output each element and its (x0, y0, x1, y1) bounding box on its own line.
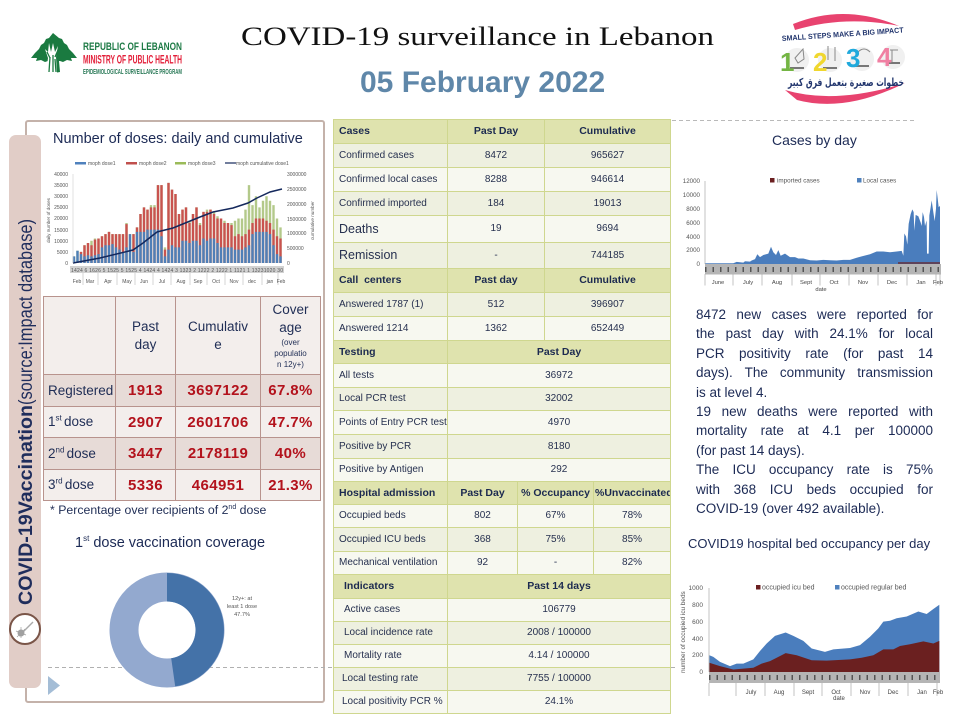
left axis: 0 (65, 261, 68, 267)
cases: 9694 (596, 223, 619, 234)
table: vaccination: 1913 (128, 382, 163, 399)
chart: hospital bed occupancy: date (833, 696, 845, 702)
chart: hospital bed occupancy: July (746, 690, 756, 696)
sidebar text: COVID-19Vaccination(source:Impact database) (16, 219, 37, 605)
axis: 800 (692, 602, 703, 609)
heading: first dose coverage: 1st dose vaccination coverage (75, 534, 265, 551)
table: vaccination: 464951 (192, 476, 244, 494)
text block: daily summary: (for past 14 days). (696, 443, 805, 458)
table: vaccination: 2178119 (188, 445, 248, 462)
table: vaccination: Cumulativ (188, 318, 248, 334)
right axis: 1500000 (287, 217, 307, 223)
local cases area (705, 190, 940, 264)
table: vaccination: day (135, 336, 156, 352)
left axis: 15000 (54, 228, 68, 234)
cases: Active cases (344, 604, 400, 615)
arabic slogan: خطوات صغيرة بتعمل فرق كبير (787, 76, 904, 89)
cases: Mechanical ventilation (339, 557, 437, 568)
donut label: least 1 dose (227, 604, 257, 610)
text block: daily summary: 8472 new cases were reported for (696, 307, 933, 322)
table: vaccination: Past (132, 318, 159, 334)
table: vaccination: e (214, 336, 222, 352)
cases: 965627 (591, 150, 624, 160)
table: vaccination: 3rd dose (48, 477, 94, 492)
cases: 75% (546, 534, 566, 544)
chart: hospital bed occupancy: Sept (802, 690, 815, 696)
cases: 19013 (594, 198, 621, 208)
donut label (227, 596, 257, 618)
chart: cases by day: Sept (800, 280, 812, 286)
table: vaccination: Cover (272, 302, 308, 317)
cumulative line (73, 189, 282, 263)
cases: Past Day (474, 125, 518, 137)
cases: Local positivity PCR % (342, 696, 443, 707)
legend (770, 178, 896, 184)
chart: cases by day: June (712, 280, 724, 286)
table: vaccination: 2nd dose (48, 445, 96, 461)
date band (709, 672, 940, 683)
table: vaccination: 3447 (128, 445, 163, 462)
cases: 4.14 / 100000 (528, 650, 590, 661)
table: vaccination: Registered (48, 383, 113, 398)
cases: Cumulative (579, 274, 636, 286)
axis: 10000 (683, 192, 701, 199)
heading: number of doses: Number of doses: daily and cumulative (53, 131, 303, 147)
areas (709, 605, 939, 672)
table: vaccination: 2601706 (187, 414, 249, 430)
chart: cases by day: Oct (829, 280, 839, 286)
donut label: 12y+: at (232, 596, 252, 602)
cases: Past Day (460, 487, 505, 499)
cases: 24.1% (545, 696, 573, 707)
cases (334, 120, 671, 713)
cases: 744185 (591, 250, 624, 260)
cases: 36972 (545, 370, 573, 380)
months: Mar (86, 279, 95, 285)
legend: moph cumulative dose1 (236, 161, 289, 167)
left axis: 20000 (54, 216, 68, 222)
cases: 1362 (485, 322, 507, 334)
cases: Local testing rate (342, 673, 418, 684)
table: vaccination: (over (281, 338, 300, 347)
axis (689, 585, 703, 676)
cases: Local incidence rate (344, 627, 433, 638)
chart: hospital bed occupancy: Dec (888, 690, 898, 696)
footnote: * Percentage over recipients of 2nd dose (50, 503, 266, 517)
legend: Local cases (863, 178, 896, 184)
axis: 600 (692, 619, 703, 626)
sidebar: vaccination label (9, 135, 41, 688)
axis: 200 (692, 652, 703, 659)
cases: Confirmed local cases (339, 174, 437, 184)
icon: cedar tree (31, 33, 77, 73)
months: Aug (177, 279, 186, 285)
chart: cases by day: Aug (772, 280, 782, 286)
cases: Past Day (537, 346, 581, 358)
chart: donut first dose coverage (110, 572, 257, 688)
right axis: 0 (287, 261, 290, 267)
table: vaccination: 21.3% (268, 476, 313, 494)
axis (683, 178, 701, 268)
months: Sep (194, 279, 203, 285)
text block: daily summary: with 368 ICU beds occupied for (696, 482, 933, 497)
logo text: MINISTRY OF PUBLIC HEALTH (83, 54, 182, 66)
axis: 400 (692, 636, 703, 643)
imported cases line (898, 262, 940, 264)
months: Jun (140, 279, 148, 285)
cases: 82% (622, 557, 642, 568)
cases: Deaths (339, 222, 379, 236)
chart: cases by day: July (743, 280, 753, 286)
table: vaccination: n 12y+) (277, 360, 304, 369)
heading: cases by day: Cases by day (772, 132, 857, 148)
logo text: REPUBLIC OF LEBANON (83, 41, 182, 53)
step numbers: 4 (877, 42, 892, 72)
months: Oct (212, 279, 220, 285)
cases: Answered 1787 (1) (339, 298, 424, 310)
cases: Call centers (339, 274, 401, 286)
logo: Ministry of Public Health (31, 33, 182, 76)
text block: daily summary: The ICU occupancy rate is 75% (696, 462, 933, 477)
table: vaccination: age (279, 320, 302, 335)
cases: 184 (488, 198, 504, 208)
months: Feb (277, 279, 286, 285)
cases: Positive by PCR (339, 440, 411, 452)
months: dec (248, 279, 257, 285)
logo text (83, 41, 182, 76)
right axis: 2000000 (287, 202, 307, 208)
chart: hospital bed occupancy: Oct (831, 690, 841, 696)
left axis: 5000 (57, 250, 68, 256)
text block: daily summary: days). The community transmission (696, 365, 933, 380)
axis: 1000 (689, 585, 703, 592)
slogan: SMALL STEPS MAKE A BIG IMPACT (782, 25, 904, 43)
cases: 32002 (545, 393, 573, 404)
months: Nov (230, 279, 239, 285)
cases: Cases (339, 125, 370, 137)
cases: 802 (474, 510, 491, 521)
right axis (287, 172, 307, 267)
cases: Past day (474, 274, 518, 286)
table: vaccination (43, 296, 321, 501)
text block: daily summary: PCR positivity rate (for past 14 (696, 346, 933, 361)
chart: hospital bed occupancy (678, 584, 944, 702)
step numbers: 2 (813, 47, 827, 77)
right axis: 3000000 (287, 172, 307, 178)
cases: %Unvaccinated (595, 487, 671, 499)
cases: 8472 (485, 150, 507, 160)
cases: Positive by Antigen (339, 464, 424, 475)
donut label: 47.7% (234, 612, 250, 618)
cases: 8288 (485, 174, 507, 184)
title: COVID-19 surveillance in Lebanon (241, 22, 714, 51)
cases: 7755 / 100000 (527, 673, 591, 684)
months: May (122, 279, 132, 285)
pink arcs (785, 14, 905, 104)
left axis: 40000 (54, 172, 68, 178)
left axis: 35000 (54, 183, 68, 189)
table: vaccination: 1st dose (48, 414, 93, 429)
heading: hospital bed occupancy: COVID19 hospital bed occupancy per day (688, 536, 930, 551)
chart: doses daily and cumulative (46, 161, 315, 285)
legend: occupied regular bed (841, 584, 906, 592)
logo text: EPIDEMIOLOGICAL SURVEILLANCE PROGRAM (83, 67, 182, 76)
left axis (54, 172, 68, 267)
chart: cases by day: Dec (887, 280, 897, 286)
right axis: 2500000 (287, 187, 307, 193)
legend (75, 161, 289, 167)
step badges (785, 45, 905, 72)
table: vaccination: 3697122 (187, 382, 249, 399)
cases: Occupied ICU beds (339, 534, 426, 544)
cases: Confirmed imported (339, 198, 427, 208)
months: Feb (73, 279, 82, 285)
left axis: 10000 (54, 239, 68, 245)
chart: cases by day: Jan (916, 280, 926, 286)
text block: daily summary: the past day with 24.1% for local (696, 326, 933, 341)
table: vaccination: 40% (275, 445, 306, 462)
cases: - (554, 557, 557, 568)
cases: Mortality rate (344, 650, 402, 661)
panel: vaccination (25, 120, 325, 703)
cases: 19 (490, 223, 502, 234)
cases: 512 (488, 298, 504, 310)
step numbers (780, 42, 892, 77)
cases: 92 (477, 557, 488, 568)
axis: 6000 (686, 220, 701, 227)
text block: daily summary: mortality rate at 4.1 per 100000 (696, 423, 933, 438)
chart: hospital bed occupancy: number of occupied icu beds (680, 591, 687, 673)
cases: Cumulative (579, 125, 636, 137)
axis: 8000 (686, 206, 701, 213)
legend: moph dose1 (88, 161, 116, 167)
left axis: 30000 (54, 194, 68, 200)
chart: doses daily and cumulative: 1424 6 1626 5 1525 5 1525 4 1424 4 1424 3 1323 2 1222 2 1222 1 1121 1 13231020 30 (71, 268, 283, 274)
axis: 0 (697, 261, 701, 268)
text block: daily summary: 19 new deaths were reported with (696, 404, 933, 419)
legend: occupied icu bed (762, 584, 815, 592)
table: vaccination: 5336 (128, 476, 163, 494)
cases: 652449 (591, 322, 624, 334)
months: jan (266, 279, 274, 285)
cases: Local PCR test (339, 393, 406, 404)
cases: 946614 (591, 174, 624, 184)
months (73, 279, 286, 285)
chart: hospital bed occupancy: Feb (933, 690, 944, 696)
logo: small steps make a big impact (780, 14, 905, 104)
cases: 106779 (542, 604, 576, 615)
chart: cases by day: Feb (933, 280, 943, 286)
table: vaccination: populatio (274, 349, 307, 358)
stacked bars (74, 183, 280, 263)
chart: cases by day (683, 178, 943, 293)
date band (705, 264, 941, 274)
chart: hospital bed occupancy: Jan (917, 690, 927, 696)
cases: 292 (551, 464, 567, 475)
chart: doses daily and cumulative: cumulative number (310, 201, 315, 240)
months: Apr (104, 279, 112, 285)
cases: All tests (339, 370, 374, 380)
axis: 4000 (686, 234, 701, 241)
axis: 0 (699, 669, 703, 676)
table: vaccination: 47.7% (268, 414, 313, 430)
chart: hospital bed occupancy: Aug (774, 690, 784, 696)
right axis: 500000 (287, 246, 304, 252)
cases: Points of Entry PCR test (339, 416, 447, 428)
legend: imported cases (777, 178, 820, 184)
cases: 78% (622, 510, 642, 521)
cases: Hospital admission (339, 487, 435, 499)
cases: Occupied beds (339, 510, 406, 521)
cases: Testing (339, 346, 376, 358)
left axis: 25000 (54, 205, 68, 211)
axis: 12000 (683, 178, 701, 185)
cases: 368 (474, 534, 491, 544)
date band (70, 266, 284, 273)
icon: triangle marker (48, 676, 60, 695)
icon: syringe and virus (10, 614, 40, 644)
legend (756, 584, 906, 592)
step numbers: 3 (846, 43, 860, 73)
right axis: 1000000 (287, 231, 307, 237)
cases: 2008 / 100000 (527, 627, 591, 638)
text block: daily summary (696, 307, 933, 516)
cases: 67% (546, 510, 566, 521)
text block: daily summary: COVID-19 (over 492 available). (696, 501, 884, 516)
table: vaccination: 67.8% (268, 382, 313, 399)
table: surveillance data (333, 119, 671, 714)
cases: Confirmed cases (339, 150, 414, 160)
chart: hospital bed occupancy: Nov (860, 690, 870, 696)
cases: Indicators (344, 580, 394, 592)
cases: % Occupancy (521, 487, 590, 499)
cases: Remission (339, 248, 397, 262)
cases: - (494, 250, 498, 260)
legend: moph dose3 (188, 161, 216, 167)
step numbers: 1 (780, 47, 794, 77)
text block: daily summary: is at level 4. (696, 385, 767, 400)
chart: cases by day: date (815, 287, 827, 293)
legend: moph dose2 (139, 161, 167, 167)
axis: 2000 (686, 247, 701, 254)
axis titles: daily number of doses (46, 197, 51, 243)
cases: Answered 1214 (339, 322, 408, 334)
cases: 8180 (548, 440, 570, 452)
table: vaccination: 2907 (128, 414, 163, 430)
cases: Past 14 days (527, 580, 591, 592)
cases: 85% (622, 534, 642, 544)
date heading: 05 February 2022 (360, 66, 605, 99)
cases: 396907 (591, 298, 624, 310)
cases: 4970 (548, 416, 570, 428)
chart: cases by day: Nov (858, 280, 868, 286)
months: Jul (159, 279, 165, 285)
